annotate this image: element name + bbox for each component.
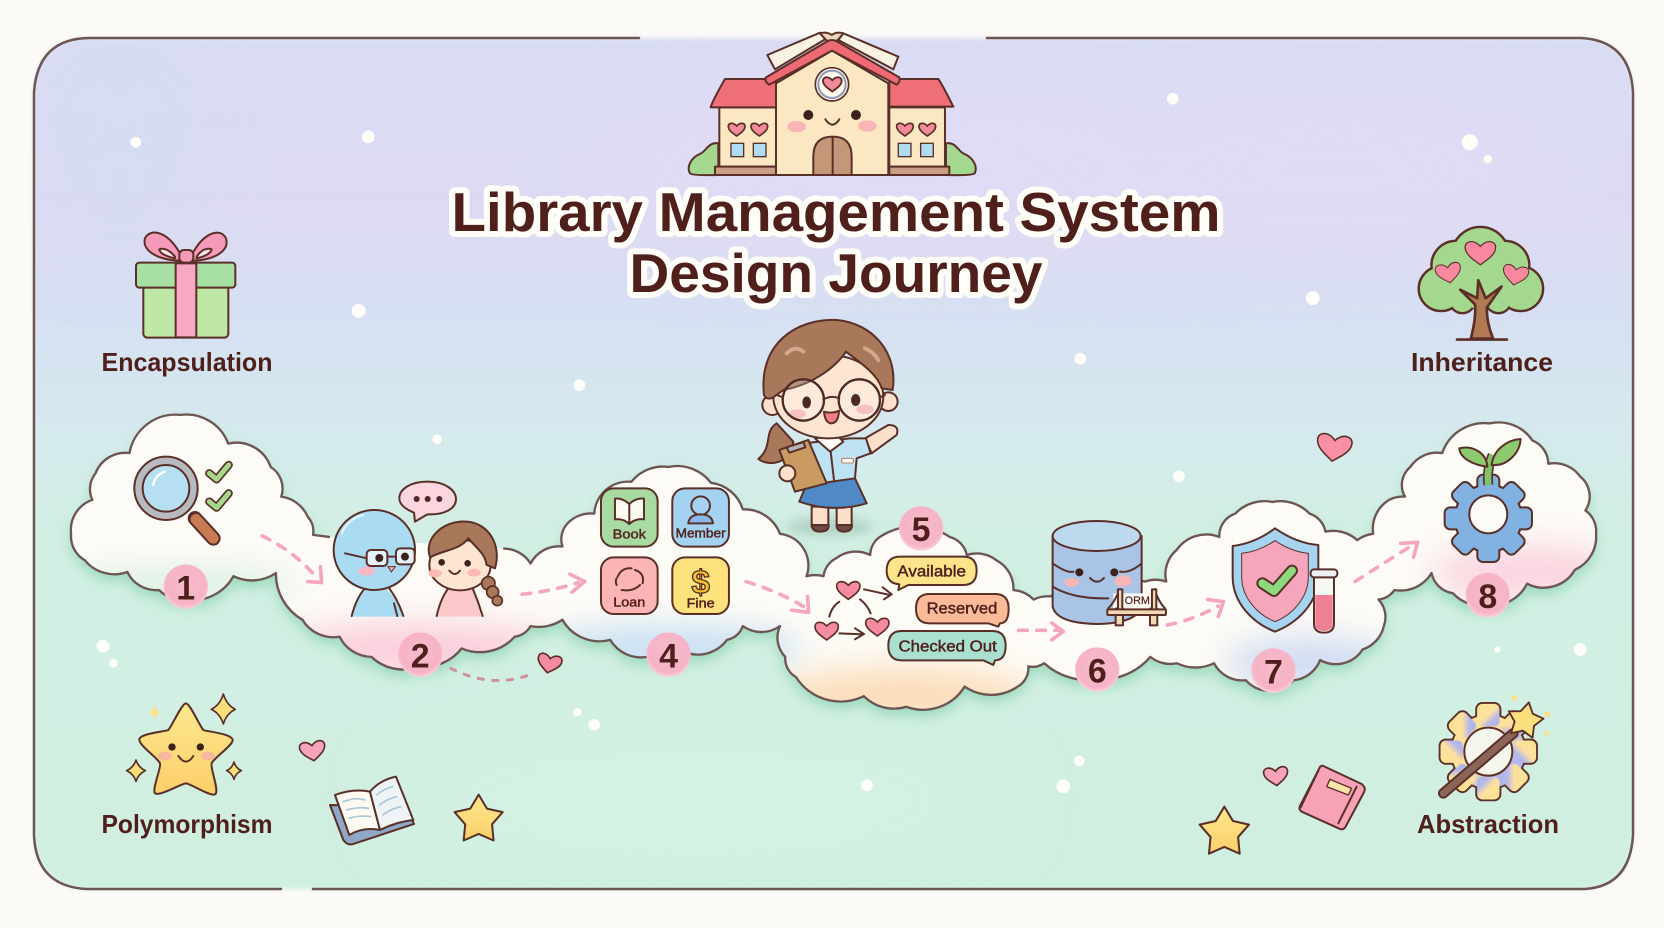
- badge digits: 4: [659, 637, 678, 675]
- white floating dots: [97, 93, 1586, 793]
- tile: Member: Member: [676, 527, 726, 541]
- student character: [428, 522, 502, 617]
- tile: Loan: Loan: [613, 595, 645, 610]
- open book: [330, 777, 414, 844]
- label: Abstraction: Abstraction: [1417, 809, 1559, 839]
- heart: [1263, 766, 1289, 787]
- step 1: magnifying glass with checks: [134, 457, 229, 538]
- icon: gift box (encapsulation): [136, 233, 235, 338]
- label: Polymorphism: Polymorphism: [102, 809, 272, 839]
- icon: gear with magic wand (abstraction): [1441, 695, 1550, 799]
- tile: Fine: [672, 557, 729, 614]
- notebook: [1299, 766, 1365, 829]
- speech bubble: [399, 482, 456, 522]
- decorations bottom right: star, heart, notebook: [1200, 766, 1365, 854]
- step 7: shield with check and test tube: [1233, 528, 1337, 633]
- title: [452, 181, 1220, 304]
- decorations bottom left: heart, book, star: [299, 740, 503, 844]
- badge digits: 8: [1478, 578, 1497, 616]
- cloud path: shadow under the journey: [64, 415, 1624, 724]
- status: Reserved: [916, 594, 1009, 627]
- status: Reserved: Reserved: [927, 600, 997, 617]
- tile: Fine: Fine: [687, 595, 715, 610]
- step number badges: [163, 506, 1510, 693]
- icon: library building mascot: [689, 33, 976, 175]
- badge digits: 6: [1088, 652, 1107, 690]
- ORM bridge: ORM: [1125, 595, 1150, 607]
- status: Checked Out: Checked Out: [898, 639, 998, 656]
- step 8: gear with sprout: [1446, 439, 1531, 561]
- icon: smiling star (polymorphism): [127, 694, 241, 795]
- dashed line to heart: [451, 652, 563, 681]
- badge digits: 1: [176, 570, 195, 608]
- state hearts: [815, 582, 892, 640]
- step 5: state machine and status bubbles: [815, 557, 1009, 665]
- tile: Fine: $: [691, 564, 710, 601]
- blue character: [334, 510, 415, 617]
- badge digits: 5: [912, 511, 931, 549]
- label: Inheritance: Inheritance: [1411, 347, 1553, 377]
- step 4: domain class tiles: [601, 488, 729, 614]
- heart: [299, 740, 327, 762]
- step 6: database with ORM bridge: [1053, 521, 1166, 625]
- floating heart above step 7: [1315, 433, 1353, 463]
- librarian character: [758, 320, 898, 536]
- label: Encapsulation: Encapsulation: [102, 347, 272, 377]
- tile: Book: Book: [613, 526, 646, 541]
- title: Library Management System: [452, 181, 1220, 243]
- star: [1200, 807, 1249, 854]
- badge digits: 2: [411, 637, 430, 675]
- status: Available: Available: [897, 564, 966, 581]
- icon: heart tree (inheritance): [1420, 228, 1542, 340]
- arrows between steps: [262, 536, 1418, 640]
- status: Available: [887, 557, 977, 590]
- status: Checked Out: [888, 631, 1006, 665]
- badge digits: [176, 511, 1497, 691]
- badge digits: 7: [1264, 653, 1283, 691]
- small star: [455, 795, 503, 841]
- step 2: teacher and student talking: [334, 482, 563, 681]
- title: Design Journey: [630, 242, 1043, 304]
